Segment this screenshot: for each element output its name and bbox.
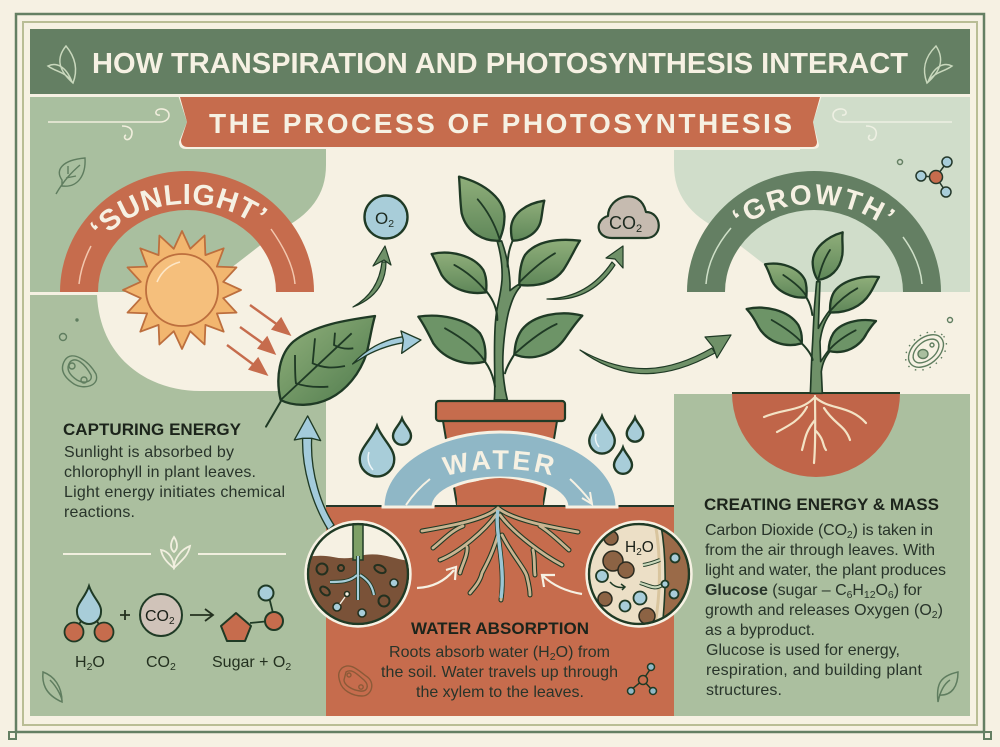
carbon dioxide circle: [140, 594, 182, 636]
leaf left lower: [418, 316, 485, 363]
label: water in soil: H: [625, 539, 636, 556]
icon: leaf bottom right: [938, 672, 958, 702]
leaf left upper: [432, 253, 486, 293]
equation labels: Sugar + O: [212, 654, 285, 671]
icon: small leaf outline: [56, 158, 85, 194]
sugar molecule: [221, 586, 283, 641]
icon: carbon dioxide cloud: 2: [636, 223, 642, 235]
text: capturing energy: CAPTURING ENERGY: [63, 420, 242, 439]
stem and leaves: [747, 232, 879, 393]
text: creating energy and mass: [704, 495, 946, 699]
panel: lower left capturing energy: [30, 295, 326, 716]
text: capturing energy: reactions.: [64, 504, 135, 521]
equation labels: O: [92, 654, 105, 671]
text: capturing energy: [63, 420, 285, 521]
water molecule: [64, 586, 114, 642]
icon: oxygen bubble: [364, 196, 408, 238]
arrows: sunlight rays: [227, 305, 289, 374]
leaf right top: [511, 201, 544, 241]
zoom circle: root hair: [586, 520, 700, 630]
arrow: to growth: [580, 335, 731, 374]
panel: top right growth: [674, 97, 970, 292]
swirl left: [48, 109, 169, 140]
panel: lower right creating energy: [674, 394, 970, 716]
title: HOW TRANSPIRATION AND PHOTOSYNTHESIS INTERACT: [92, 48, 908, 80]
icon: oxygen bubble: 2: [388, 218, 394, 230]
text: water absorption: 2: [550, 651, 556, 663]
text: creating energy and mass: 6: [888, 589, 894, 601]
label: water in soil: 2: [636, 547, 642, 558]
leaf right lower: [514, 313, 582, 357]
text: creating energy and mass: from the air through leaves. With: [705, 542, 935, 559]
swirl right: [833, 109, 952, 140]
soil surface line: [326, 505, 674, 507]
plus: [120, 610, 130, 620]
text: creating energy and mass: 6: [847, 589, 853, 601]
subtitle text: THE PROCESS OF PHOTOSYNTHESIS: [209, 108, 792, 139]
plant: potted plant: [418, 177, 582, 400]
text: water absorption: O) from: [556, 644, 610, 661]
icon: microbe left: [60, 319, 97, 387]
text: creating energy and mass: ): [938, 602, 943, 619]
text: capturing energy: chlorophyll in plant leaves.: [64, 464, 256, 481]
equation labels: 2: [170, 661, 176, 673]
text: creating energy and mass: structures.: [706, 682, 782, 699]
label: water: WATER: [441, 450, 554, 476]
header band: [30, 29, 970, 94]
pot: [436, 401, 565, 505]
icon: molecule in soil: [628, 664, 656, 694]
equation labels: 2: [87, 661, 93, 673]
equation labels: H: [75, 654, 87, 671]
text: capturing energy: Light energy initiates chemical: [64, 484, 285, 501]
zoom circle: soil: [304, 520, 412, 628]
text: water absorption: [381, 619, 618, 701]
text: creating energy and mass: ) is taken in: [853, 522, 933, 539]
text: capturing energy: Sunlight is absorbed by: [64, 444, 234, 461]
text: creating energy and mass: as a byproduct.: [705, 622, 815, 639]
icon: oxygen bubble: O: [375, 209, 388, 228]
icon: leaf bottom left: [43, 672, 62, 702]
arch: sunlight: [60, 171, 314, 292]
text: creating energy and mass: CREATING ENERGY & MASS: [704, 495, 939, 514]
arrow: [190, 609, 213, 621]
text: creating energy and mass: Glucose is used for energy,: [706, 642, 900, 659]
cream roots: [764, 396, 866, 463]
icon: carbon dioxide cloud: [599, 196, 659, 238]
text: creating energy and mass: Glucose (sugar – C: [705, 582, 847, 599]
text: creating energy and mass: respiration, and building plant: [706, 662, 923, 679]
icon: sun: [123, 231, 241, 349]
large leaf: [266, 316, 375, 427]
panel: water absorption soil: [326, 507, 674, 716]
icon: carbon dioxide cloud: CO: [609, 213, 636, 233]
water drops: [360, 416, 643, 476]
text: water absorption: WATER ABSORPTION: [411, 619, 589, 638]
equation labels: CO: [146, 654, 170, 671]
text: creating energy and mass: Carbon Dioxide (CO: [705, 522, 847, 539]
arrow: blue up from roots: [294, 416, 334, 530]
equation labels: [75, 654, 291, 673]
icon: left header leaves: [48, 46, 76, 83]
arrow: oxygen release: [353, 246, 391, 307]
stem: [494, 241, 520, 400]
plant roots: [422, 508, 578, 600]
carbon dioxide circle: CO: [145, 608, 169, 625]
equation labels: 2: [285, 661, 291, 673]
soil half circle: [732, 393, 900, 477]
text: water absorption: the xylem to the leaves.: [416, 684, 584, 701]
arrow: blue to plant: [353, 331, 421, 364]
arch: growth: [687, 171, 941, 292]
text: creating energy and mass: 2: [847, 529, 853, 541]
label: sunlight: ‘SUNLIGHT’: [90, 184, 268, 230]
equation diagram: [64, 586, 291, 673]
leaf top: [459, 177, 504, 241]
text: creating energy and mass: H: [852, 582, 864, 599]
arrow: carbon dioxide: [547, 246, 623, 299]
subtitle ribbon: [178, 95, 822, 149]
leaf right upper: [519, 240, 580, 285]
divider with sprig: [63, 537, 286, 568]
carbon dioxide circle: 2: [169, 616, 175, 627]
text: creating energy and mass: 12: [864, 589, 876, 601]
panel: top left sunlight: [30, 97, 326, 292]
icon: microbe right: [898, 318, 954, 378]
text: water absorption: Roots absorb water (H: [389, 644, 550, 661]
text: creating energy and mass: 2: [932, 609, 938, 621]
arrows: water to roots: [417, 567, 582, 594]
text: creating energy and mass: O: [876, 582, 888, 599]
icon: right header leaves: [924, 46, 952, 83]
icon: microbe in soil: [339, 666, 372, 696]
text: creating energy and mass: light and water, the plant produces: [705, 562, 946, 579]
label: growth: ‘GROWTH’: [732, 184, 896, 221]
label: water in soil: O: [642, 539, 654, 556]
growth plant: [732, 232, 900, 477]
text: creating energy and mass: growth and releases Oxygen (O: [705, 602, 932, 619]
arch: water: [382, 430, 618, 508]
text: creating energy and mass: ) for: [894, 582, 923, 599]
icon: molecule top right: [898, 157, 952, 197]
text: water absorption: the soil. Water travels up through: [381, 664, 618, 681]
